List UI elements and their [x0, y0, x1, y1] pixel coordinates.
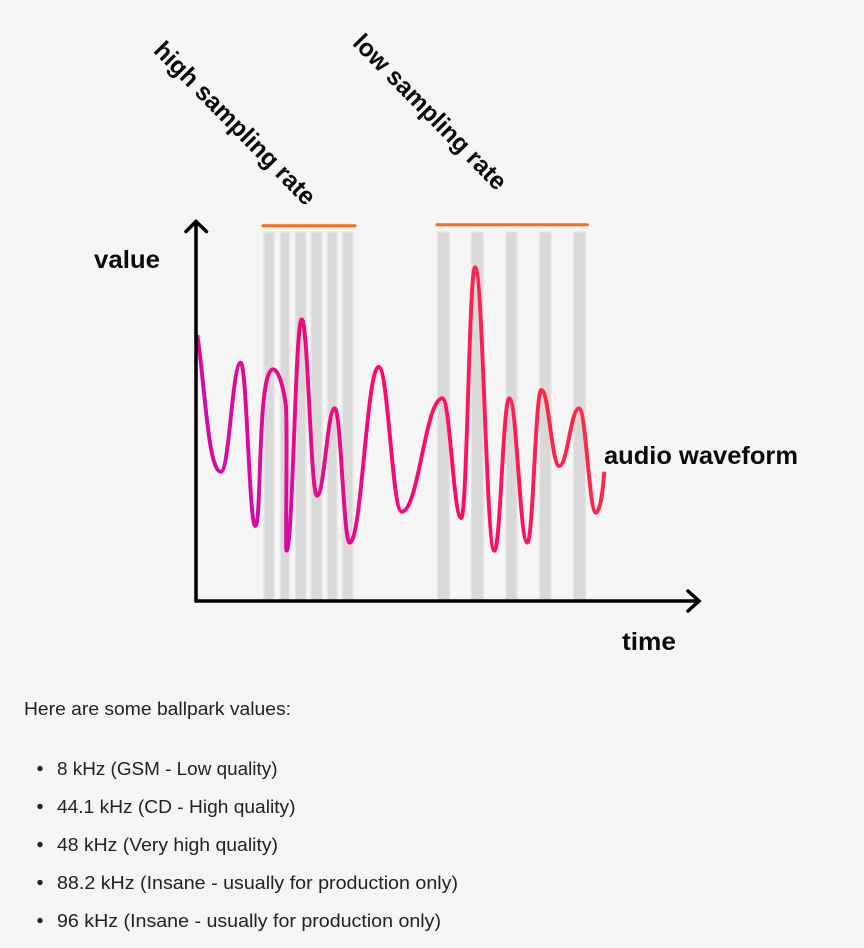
list item: 88.2 kHz: 88.2 kHz (Insane - usually for production only) — [57, 872, 458, 893]
axis label: time: time — [622, 628, 676, 656]
axes — [186, 222, 699, 611]
bracket: high sampling rate — [263, 224, 355, 227]
list item: 8 kHz: 8 kHz (GSM - Low quality) — [57, 758, 278, 779]
list item: 44.1 kHz: 44.1 kHz (CD - High quality) — [57, 796, 296, 817]
list of ballpark values — [37, 758, 458, 931]
bracket: low sampling rate — [437, 223, 588, 226]
label: high sampling rate: high sampling rate — [148, 36, 321, 211]
sample bars: high sampling rate — [264, 232, 353, 600]
label: low sampling rate: low sampling rate — [347, 29, 512, 196]
sample bars: low sampling rate — [438, 232, 586, 600]
intro text: Here are some ballpark values: — [24, 698, 291, 719]
list item: 96 kHz: 96 kHz (Insane - usually for production only) — [57, 910, 441, 931]
x axis arrow — [196, 591, 699, 611]
label: audio waveform: audio waveform — [604, 442, 798, 470]
list item: 48 kHz: 48 kHz (Very high quality) — [57, 834, 278, 855]
axis label: value: value — [94, 246, 160, 274]
y axis arrow — [186, 222, 206, 601]
audio waveform curve — [197, 267, 604, 551]
